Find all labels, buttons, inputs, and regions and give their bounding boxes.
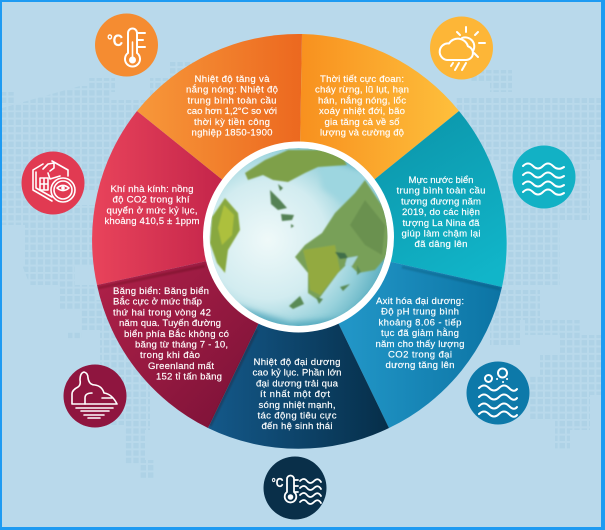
acidification text: năm cho thấy lượng: [376, 339, 464, 350]
weather text: hán, nắng nóng, lốc: [318, 95, 406, 106]
ocean heat text: đại dương trải qua: [256, 378, 339, 389]
ocean heat text: sóng nhiệt mạnh,: [258, 400, 336, 411]
acidification text: khoảng 8.06 - tiếp: [378, 317, 462, 328]
sea ice text: Băng biển: Băng biển: [113, 286, 209, 297]
acidification text: tục đã giảm hằng: [381, 328, 459, 339]
acidification text: Độ pH trung bình: [381, 307, 459, 318]
weather text: xoáy nhiệt đới, bão: [319, 106, 405, 117]
panel: temperature: [137, 34, 302, 241]
sea level text: giúp làm chậm lại: [402, 228, 480, 240]
sea level text: trung bình toàn cầu: [396, 186, 486, 197]
acidification text: [376, 296, 464, 371]
dotted world map: [2, 62, 601, 478]
sea ice text: năm qua. Tuyến đường: [119, 318, 221, 329]
icon: greenhouse gas: [22, 152, 84, 214]
icon: bubbles and waves: [466, 362, 530, 424]
temperature text: [186, 74, 278, 138]
temperature text: Nhiệt độ tăng và: [194, 74, 270, 85]
icon: iceberg: [64, 364, 126, 428]
sea ice text: thứ hai trong vòng 42: [113, 307, 211, 318]
ocean heat text: Nhiệt độ đại dương: [254, 357, 340, 368]
temperature text: thời kỳ tiền công: [194, 117, 270, 128]
sea ice text: băng từ tháng 7 - 10,: [135, 340, 228, 350]
sea ice text: trong khi đảo: [140, 350, 200, 361]
sea level text: tương đương năm: [401, 196, 481, 207]
sea ice text: 152 tỉ tấn băng: [156, 372, 222, 383]
icon: thermometer: °C: [107, 31, 123, 50]
panel: greenhouse gases: [92, 111, 298, 285]
sea ice text: Bắc cực ở mức thấp: [113, 297, 202, 308]
seam shadows: [98, 266, 500, 426]
greenhouse text: quyển ở mức kỷ lục,: [106, 205, 198, 216]
sea level text: [396, 175, 486, 250]
weather text: gia tăng cả về số: [324, 117, 400, 128]
circular wheel: [92, 34, 507, 449]
ocean heat text: đến hệ sinh thái: [262, 421, 332, 432]
greenhouse text: khoảng 410,5 ± 1ppm: [104, 216, 200, 227]
weather text: [315, 74, 409, 138]
sea level text: tượng La Nina đã: [402, 218, 480, 229]
sea level text: 2019, do các hiện: [402, 207, 480, 218]
icon: waves: [512, 146, 576, 208]
greenhouse text: độ CO2 trong khí: [112, 195, 190, 206]
sea ice text: biển phía Bắc không có: [124, 329, 229, 340]
temperature text: nghiệp 1850-1900: [192, 128, 272, 138]
temperature text: trung bình toàn cầu: [188, 95, 276, 106]
weather text: Thời tiết cực đoan:: [320, 74, 404, 85]
temperature text: nắng nóng: Nhiệt độ: [186, 85, 278, 96]
acidification text: CO2 trong đại: [388, 350, 452, 360]
acidification text: Axit hóa đại dương:: [376, 296, 464, 307]
temperature text: cao hơn 1,2°C so với: [187, 106, 277, 117]
panel: ocean acidification: [298, 241, 502, 428]
sea level text: Mực nước biển: [408, 175, 474, 186]
greenhouse text: [104, 184, 200, 227]
panel: sea ice: [97, 241, 298, 428]
ocean heat text: tác động tiêu cực: [258, 410, 337, 422]
weather text: cháy rừng, lũ lụt, hạn: [315, 85, 409, 96]
panel: ocean heat: [208, 241, 389, 449]
greenhouse text: Khí nhà kính: nồng: [110, 184, 194, 195]
sea level text: đã dâng lên: [414, 239, 468, 250]
sea ice text: [113, 286, 229, 383]
ocean heat text: ít nhất một đợt: [260, 389, 330, 400]
ocean heat text: [252, 357, 342, 432]
panel: extreme weather: [298, 34, 459, 241]
weather text: lượng và cường độ: [320, 128, 404, 138]
icon: thermometer: [95, 14, 158, 76]
icon: ocean thermometer: [264, 456, 326, 520]
ocean heat text: cao kỷ lục. Phần lớn: [252, 368, 342, 379]
icon: cloud, sun and rain: [430, 16, 493, 80]
panel: sea level: [298, 111, 507, 287]
icon: ocean thermometer: °C: [272, 475, 284, 490]
globe: [203, 142, 394, 335]
acidification text: dương tăng lên: [386, 360, 454, 371]
sea ice text: Greenland mất: [148, 361, 214, 372]
